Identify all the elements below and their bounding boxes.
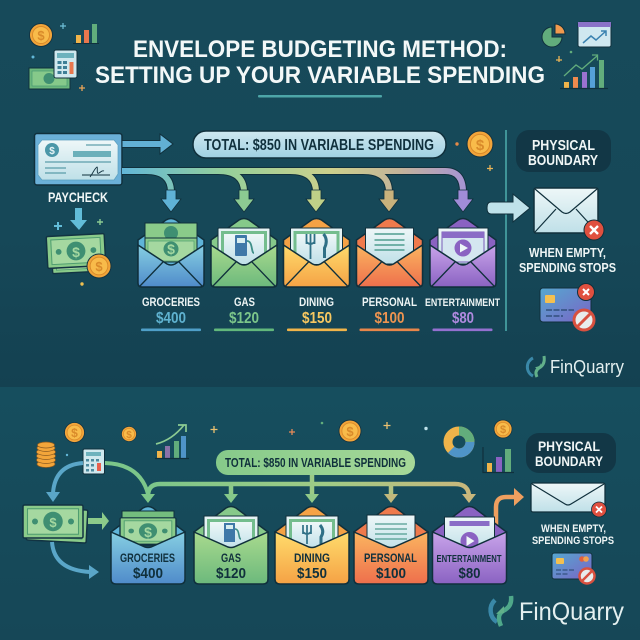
envelope: personal bottom: $100 [376,565,406,582]
paycheck arrow and cash: $ [72,244,80,260]
arrowheads into envelopes [161,190,473,212]
bottom decorative icons: coins and growth chart: $ [71,426,78,440]
arrowheads: bottom [141,494,476,503]
title: ENVELOPE BUDGETING METHOD: [133,36,507,63]
total pill: bottom: TOTAL: $850 IN VARIABLE SPENDING [225,455,406,470]
logo: top [527,356,624,377]
icon cluster: top left finance: $ [37,28,45,43]
credit card blocked: top [540,284,594,330]
empty sealed envelope: bottom [531,483,606,517]
label: entertainment: ENTERTAINMENT [425,297,500,309]
label: personal: PERSONAL [362,295,417,309]
paycheck check icon [34,134,122,185]
cash stack: bottom [23,505,88,543]
envelope: groceries [138,218,204,287]
when empty text: bottom [532,523,614,547]
total pill: TOTAL: $850 IN VARIABLE SPENDING [204,137,434,154]
envelope: gas bottom [194,506,268,584]
empty sealed envelope with x [534,188,604,240]
envelope: dining bottom: DINING [294,551,330,565]
envelope: entertainment [430,218,496,287]
bottom decorative icons: coins and growth chart: $ [126,430,132,441]
envelope: entertainment bottom: $80 [458,565,480,582]
credit card blocked: bottom [552,553,594,584]
label: personal [360,295,420,331]
when empty text: bottom: WHEN EMPTY, [541,523,606,535]
paycheck check icon: $ [49,146,55,157]
title [95,36,545,89]
bottom decorative icons: coins and growth chart [36,422,295,468]
label: gas: GAS [234,295,255,309]
envelope: dining bottom: $150 [297,565,327,582]
envelope: gas bottom: $120 [216,565,246,582]
label: dining: DINING [299,295,334,309]
label: dining [287,295,347,331]
physical boundary heading: top: PHYSICAL [532,138,595,154]
arrow: check to total [122,134,173,154]
envelope: dining bottom [275,506,349,584]
envelope: personal bottom [354,506,428,584]
title underline [258,95,382,98]
label: gas: $120 [229,310,259,327]
total pill: bottom [216,450,415,475]
arrow: calculator to cash [46,463,83,502]
icons: bottom right donut, coins, bars: $ [500,424,506,436]
logo: bottom: FinQuarry [519,598,624,626]
label: groceries: $400 [156,310,186,327]
physical boundary heading: top [516,130,611,172]
physical boundary heading: bottom: PHYSICAL [538,438,600,454]
logo: top: FinQuarry [550,357,624,377]
paycheck arrow and cash [46,208,111,286]
envelope: groceries: $ [167,241,175,257]
envelope: groceries bottom: $400 [133,565,163,582]
physical boundary heading: bottom [526,433,616,473]
when empty text: bottom: SPENDING STOPS [532,535,614,547]
flow lines: bottom [148,475,469,497]
envelope: groceries bottom [111,506,185,584]
envelope: groceries bottom: $ [144,524,152,540]
icon: coin near total [455,131,493,171]
label: dining: $150 [302,310,332,327]
paycheck label: PAYCHECK [48,190,108,205]
background: top panel [0,0,640,387]
icons: bottom right donut, coins, bars [321,420,514,472]
icons: bottom right donut, coins, bars: $ [346,424,354,439]
icon: coin near total: $ [476,137,485,154]
physical boundary heading: top: BOUNDARY [528,153,598,169]
envelope: entertainment bottom: ENTERTAINMENT [436,554,502,565]
cash stack: bottom: $ [49,515,57,530]
label: gas [214,295,274,331]
total pill [193,131,446,158]
when empty text: top: SPENDING STOPS [519,260,616,275]
envelope: personal [356,218,422,287]
envelope: gas [211,218,277,287]
icon cluster: top right charts [542,22,611,88]
envelope: entertainment bottom [432,506,506,584]
when empty text: top [519,245,616,275]
label: groceries: GROCERIES [142,295,200,309]
envelope: dining [284,218,350,287]
background: bottom panel [0,387,640,640]
arrow: to sealed envelope [487,194,530,222]
arrow: calculator to groceries [105,463,148,494]
when empty text: top: WHEN EMPTY, [529,245,606,260]
label: entertainment: $80 [452,310,474,327]
calculator [83,449,104,474]
divider [505,130,507,331]
envelope: gas bottom: GAS [221,551,241,565]
label: personal: $100 [374,310,404,327]
envelope: groceries bottom: GROCERIES [120,551,175,565]
arrow: cash curve [52,542,99,579]
title: SETTING UP YOUR VARIABLE SPENDING [95,62,545,89]
label: entertainment [425,297,500,331]
arrow: cash right [88,512,109,530]
paycheck arrow and cash: $ [95,259,103,274]
physical boundary heading: bottom: BOUNDARY [535,453,604,469]
icon cluster: top left finance [29,23,99,91]
envelope: personal bottom: PERSONAL [364,551,417,565]
arrow: entertainment to boundary [496,488,524,525]
flow lines from paycheck to envelopes [122,171,463,198]
label: groceries [141,295,201,331]
